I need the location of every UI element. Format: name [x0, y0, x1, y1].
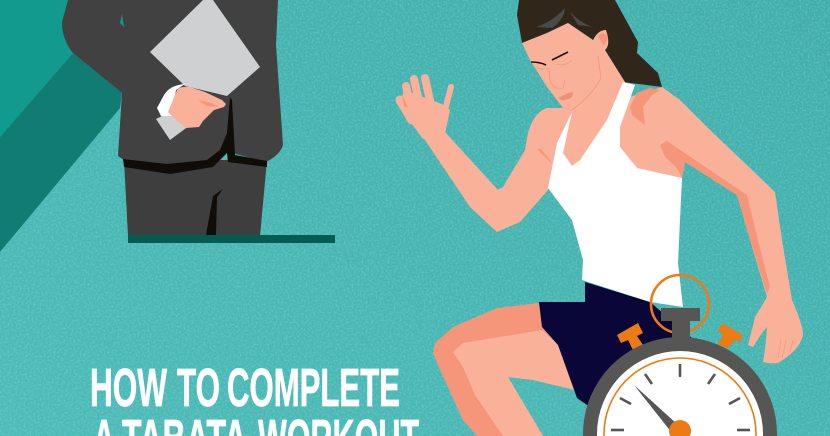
title: TO: [177, 358, 220, 418]
face and neck: [522, 23, 625, 150]
businessman figure: [62, 0, 283, 236]
right arm shading: [660, 141, 770, 294]
shoulder shading: [630, 88, 660, 125]
right arm and hand: [620, 87, 803, 363]
ear shading: [598, 33, 608, 46]
finger lines: [778, 340, 793, 358]
raised arm: [423, 108, 572, 232]
thumb shading: [198, 100, 219, 107]
shirt cuff: [157, 84, 185, 116]
stopwatch: [583, 275, 777, 436]
orange dial ring: [604, 358, 756, 436]
raised arm details: [402, 94, 552, 164]
ponytail and hair: [517, 0, 662, 87]
raised hand with fingers: [400, 78, 451, 139]
hair highlights: [536, 8, 593, 28]
crown: [661, 308, 700, 342]
leg: [433, 303, 575, 436]
jacket: [62, 0, 283, 165]
lips: [558, 92, 573, 100]
title: [90, 358, 419, 436]
leg highlight: [453, 330, 575, 436]
trousers: [124, 160, 267, 236]
tablet: [150, 0, 260, 140]
diagonal teal bands: [0, 0, 122, 252]
woman athlete: [400, 0, 803, 436]
lining fleck: [120, 14, 124, 27]
closed eyes and brows: [531, 52, 601, 111]
outer case: [583, 337, 777, 436]
tick marks: [611, 364, 750, 430]
dial face: [597, 351, 763, 436]
stopwatch hand: [634, 385, 677, 433]
jacket shadow hem: [123, 97, 267, 174]
shorts: [539, 282, 692, 405]
title: HOW: [90, 358, 167, 418]
orange side buttons: [617, 323, 743, 350]
title: COMPLETE: [227, 358, 400, 418]
lap ring: [651, 275, 709, 333]
trouser crease: [206, 189, 223, 235]
hub: [669, 420, 691, 436]
hand: [168, 87, 226, 128]
chest skin: [556, 82, 625, 170]
floor line: [128, 235, 335, 243]
white tank top: [548, 82, 683, 307]
